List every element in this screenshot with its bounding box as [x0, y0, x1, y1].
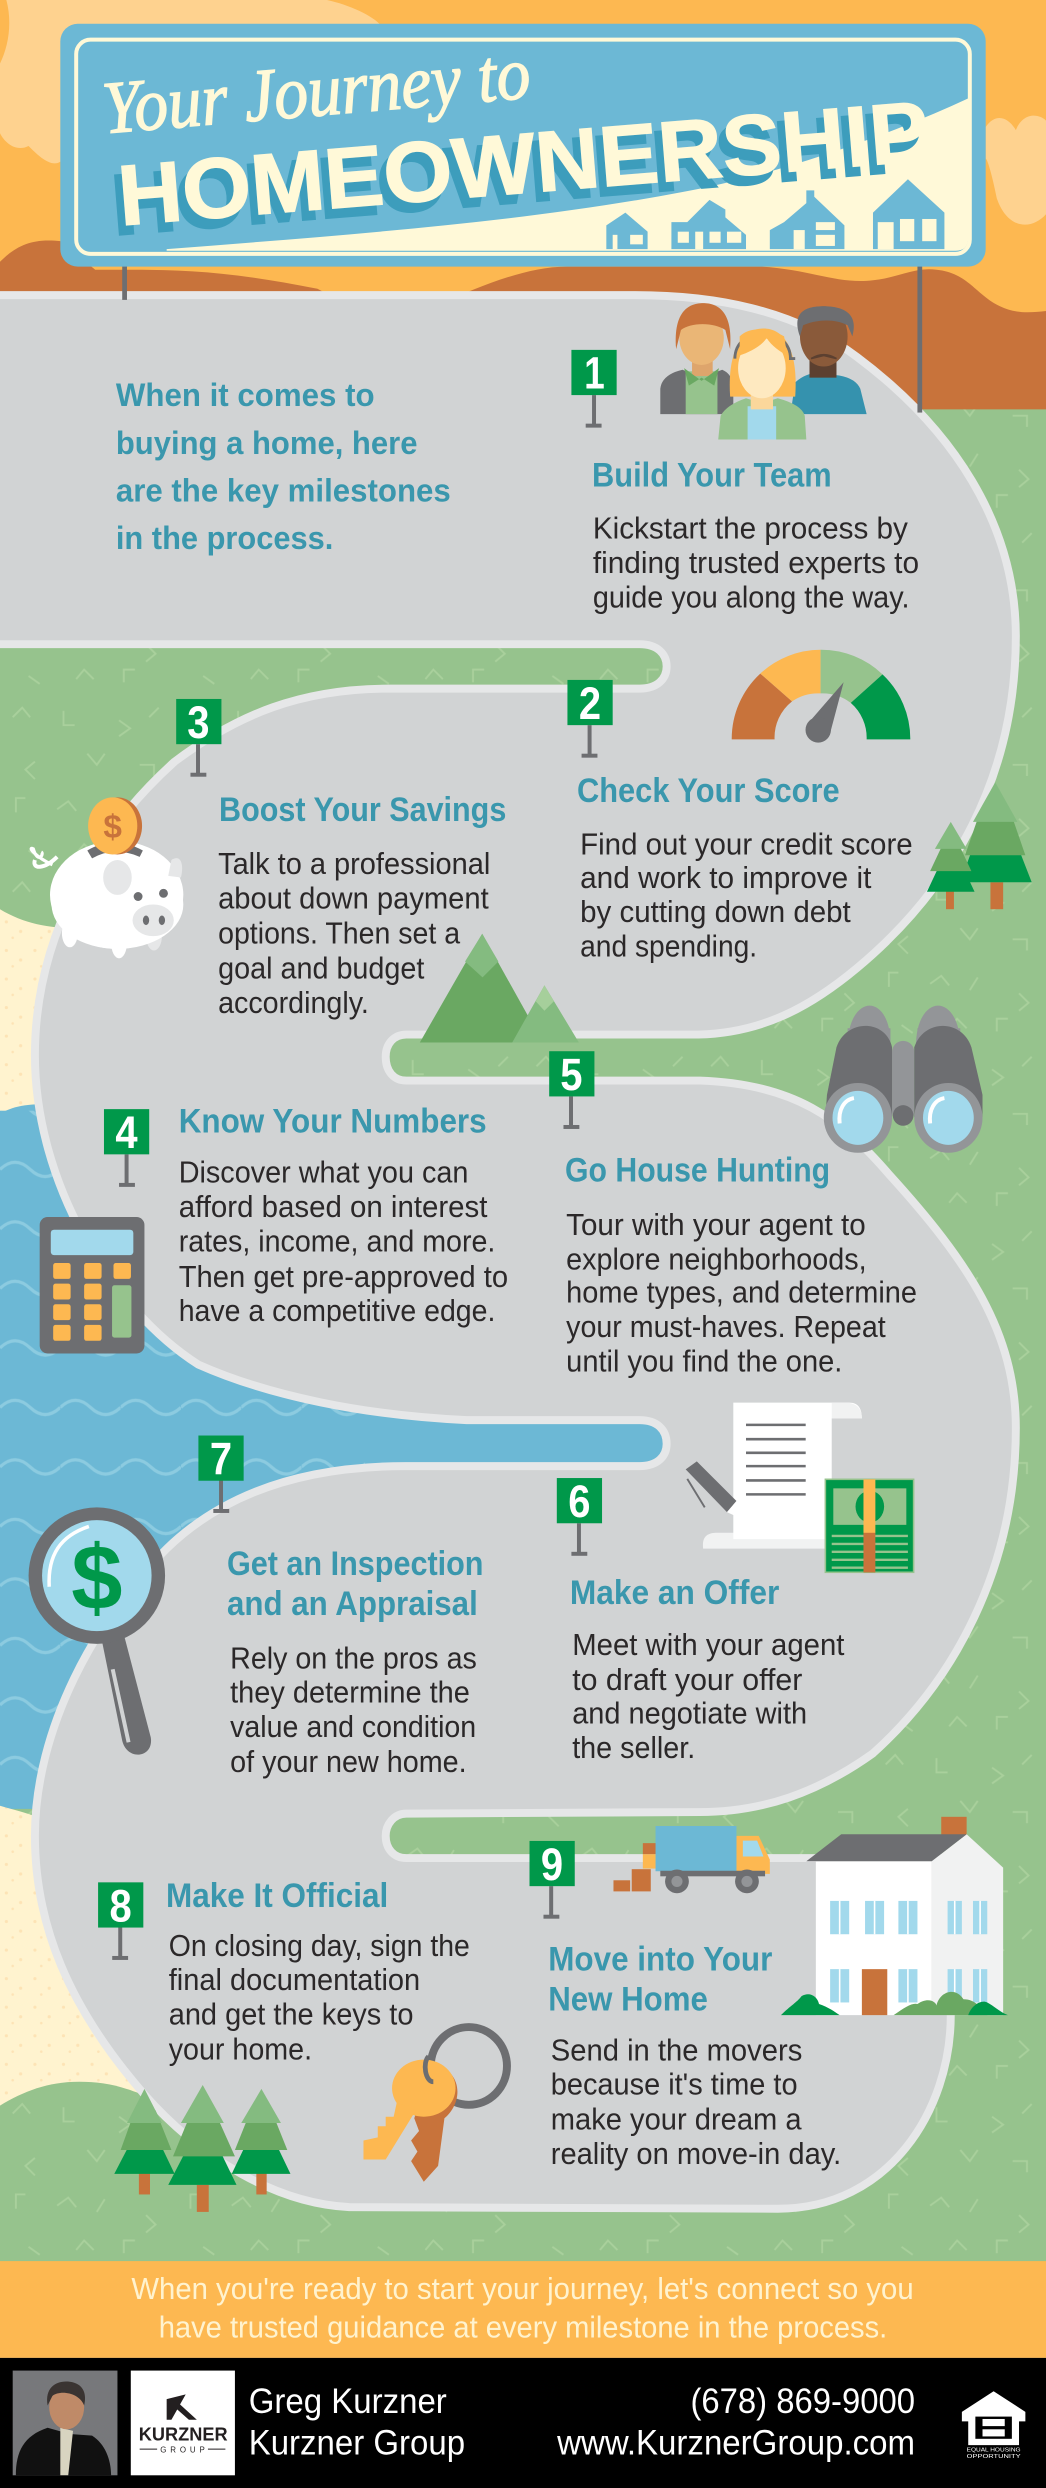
step 5: sign	[549, 1049, 594, 1129]
step 2: text: Find out your credit score	[580, 828, 913, 861]
step 5: text: Go House Hunting	[565, 1152, 830, 1190]
contact details: (678) 869-9000	[690, 2382, 915, 2421]
pen	[686, 1461, 744, 1520]
icon: equal housing opportunity	[962, 2391, 1025, 2460]
step 3: sign: 3	[187, 697, 210, 748]
step 7: text: of your new home.	[230, 1746, 467, 1779]
Kurzner logo: KURZNER	[139, 2423, 228, 2444]
title shadow: HOMEOWNERSHIP	[108, 93, 926, 254]
step 2: sign: 2	[579, 678, 601, 729]
billboard posts	[122, 262, 922, 413]
step 3: text: accordingly.	[218, 987, 369, 1020]
step 5: sign: 5	[560, 1049, 583, 1100]
step 8: sign: 8	[110, 1881, 132, 1932]
intro text: in the process.	[116, 520, 333, 556]
step 3: text: goal and budget	[218, 952, 425, 985]
icon: white house	[781, 1817, 1008, 2015]
step 5: text: your must-haves. Repeat	[566, 1311, 886, 1344]
icon: mountains	[420, 934, 579, 1042]
step 8: text: On closing day, sign the	[169, 1930, 470, 1963]
step 2: sign	[567, 678, 613, 758]
step 1: text: Kickstart the process by	[593, 513, 909, 546]
step 7: text	[227, 1545, 483, 1779]
intro text	[116, 377, 451, 556]
Kurzner logo: GROUP	[160, 2445, 205, 2454]
step 2: text: by cutting down debt	[580, 896, 851, 929]
step 7: sign: 7	[210, 1433, 232, 1484]
step 7: text: Rely on the pros as	[230, 1642, 477, 1675]
contact details: www.KurznerGroup.com	[556, 2423, 915, 2462]
icon: pine trees right	[927, 782, 1032, 909]
icon: binoculars	[824, 1006, 983, 1153]
step 6: text	[570, 1574, 845, 1765]
Kurzner logo	[131, 2371, 235, 2475]
icon: moving truck	[613, 1826, 770, 1893]
step 8: text	[166, 1877, 470, 2067]
icon: credit score gauge	[732, 650, 910, 743]
step 4: text: have a competitive edge.	[179, 1295, 495, 1328]
icon: three pine trees	[114, 2085, 290, 2212]
four small houses	[606, 179, 944, 249]
call to action band: When you're ready to start your journey, let's connect so you	[131, 2273, 914, 2306]
step 9: text: New Home	[548, 1980, 708, 2018]
step 3: sign	[176, 697, 221, 777]
agent name: Kurzner Group	[249, 2423, 465, 2462]
title script line: Your Journey to	[99, 33, 533, 150]
step 6: sign: 6	[568, 1476, 590, 1527]
step 9: sign: 9	[541, 1839, 563, 1890]
step 1: sign	[571, 348, 617, 428]
background: grass, sand and water	[0, 409, 1046, 2263]
step 5: text: explore neighborhoods,	[566, 1243, 867, 1276]
icon: equal housing opportunity: OPPORTUNITY	[967, 2454, 1021, 2460]
step 4: sign	[104, 1107, 149, 1187]
agent name	[249, 2382, 465, 2462]
step 9: sign	[530, 1839, 575, 1919]
step 9: text: Send in the movers	[551, 2034, 802, 2067]
step 2: text: Check Your Score	[577, 772, 840, 810]
step 3: text: Talk to a professional	[218, 848, 490, 881]
step 3: text: options. Then set a	[218, 918, 460, 951]
step 5: text: until you find the one.	[566, 1346, 842, 1379]
step 6: text: the seller.	[572, 1732, 695, 1765]
call to action band: have trusted guidance at every milestone in the process.	[159, 2311, 887, 2344]
step 3: text: about down payment	[218, 883, 489, 916]
step 6: text: to draft your offer	[572, 1664, 802, 1697]
intro text: are the key milestones	[116, 472, 451, 508]
intro text: When it comes to	[116, 377, 375, 413]
step 2: text: and work to improve it	[580, 862, 872, 895]
icon: piggy bank: $	[103, 809, 122, 846]
step 5: text	[565, 1152, 917, 1379]
agent photo	[13, 2371, 117, 2475]
step 1: text	[592, 456, 919, 615]
step 3: text	[218, 791, 506, 1020]
step 9: text: reality on move-in day.	[551, 2138, 841, 2171]
step 7: text: Get an Inspection	[227, 1545, 483, 1583]
icon: piggy bank	[31, 797, 183, 958]
step 9: text	[548, 1941, 841, 2171]
step 1: text: Build Your Team	[592, 456, 832, 494]
step 8: text: and get the keys to	[169, 1999, 413, 2032]
step 6: sign	[557, 1476, 602, 1556]
step 7: text: value and condition	[230, 1711, 476, 1744]
step 4: text: rates, income, and more.	[179, 1226, 495, 1259]
step 1: text: finding trusted experts to	[593, 547, 919, 580]
step 8: text: Make It Official	[166, 1877, 388, 1915]
icon: calculator	[40, 1217, 144, 1353]
billboard sign	[60, 24, 986, 267]
step 8: sign	[98, 1881, 143, 1960]
contact details	[556, 2382, 915, 2462]
step 4: text: afford based on interest	[179, 1191, 488, 1224]
winding road	[0, 295, 1016, 2209]
intro text: buying a home, here	[116, 425, 417, 461]
step 6: text: and negotiate with	[572, 1698, 807, 1731]
step 5: text: home types, and determine	[566, 1277, 917, 1310]
step 8: text: final documentation	[169, 1964, 420, 1997]
step 9: text: Move into Your	[548, 1941, 772, 1979]
step 1: text: guide you along the way.	[593, 582, 909, 615]
title main line: HOMEOWNERSHIP	[114, 83, 932, 244]
agent name: Greg Kurzner	[249, 2382, 447, 2421]
step 7: sign	[198, 1433, 244, 1513]
money stack	[825, 1479, 914, 1572]
icon: equal housing opportunity: EQUAL HOUSING	[967, 2448, 1021, 2454]
step 9: text: because it's time to	[551, 2068, 798, 2101]
step 9: text: make your dream a	[551, 2103, 802, 2136]
step 4: text: Discover what you can	[179, 1156, 468, 1189]
step 2: text: and spending.	[580, 930, 757, 963]
step 8: text: your home.	[169, 2034, 312, 2067]
step 3: text: Boost Your Savings	[219, 791, 506, 829]
step 4: text: Know Your Numbers	[179, 1103, 487, 1141]
step 6: text: Make an Offer	[570, 1574, 779, 1612]
step 7: text: and an Appraisal	[227, 1585, 478, 1623]
call to action band	[0, 2261, 1046, 2358]
icon: magnifying glass	[29, 1507, 165, 1755]
step 2: text	[577, 772, 913, 963]
step 5: text: Tour with your agent to	[566, 1209, 866, 1242]
step 7: text: they determine the	[230, 1677, 470, 1710]
footer bar	[0, 2358, 1046, 2488]
background: sky and hills	[0, 0, 1046, 476]
icon: team of three people	[660, 303, 867, 440]
cream hill on the sign	[167, 98, 968, 251]
icon: magnifying glass: $	[71, 1526, 122, 1629]
step 4: text: Then get pre-approved to	[179, 1261, 508, 1294]
step 1: sign: 1	[584, 348, 605, 399]
step 4: sign: 4	[115, 1107, 138, 1158]
step 4: text	[179, 1103, 508, 1328]
icon: keys on a ring	[363, 2027, 507, 2182]
step 6: text: Meet with your agent	[572, 1629, 845, 1662]
icon: contract, pen and money	[686, 1403, 914, 1572]
